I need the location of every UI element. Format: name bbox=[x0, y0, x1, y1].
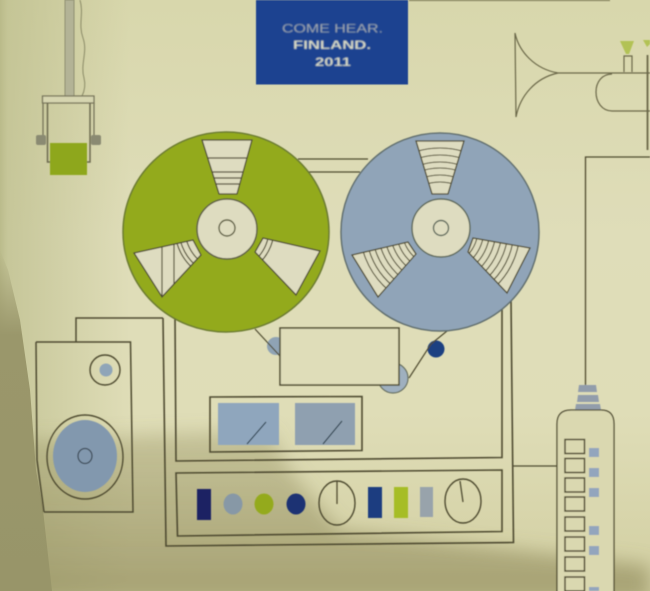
remote control bbox=[513, 157, 650, 591]
VU meters panel bbox=[210, 396, 362, 452]
speaker bbox=[36, 318, 163, 512]
connecting lines between reels bbox=[298, 159, 368, 172]
tape head box bbox=[280, 328, 399, 385]
label: come hear Finland 2011: COME HEAR. bbox=[282, 22, 383, 36]
reel: blue bbox=[341, 133, 539, 331]
control panel bbox=[176, 470, 502, 536]
label: come hear Finland 2011: FINLAND. bbox=[293, 38, 371, 52]
inner deck frame bbox=[175, 305, 502, 461]
icon: horn bbox=[515, 33, 650, 150]
top edge line bbox=[409, 0, 610, 2]
card edge on left bbox=[0, 250, 52, 591]
label: come hear Finland 2011 bbox=[256, 0, 408, 84]
reel: green bbox=[123, 132, 329, 332]
outer deck frame bbox=[163, 300, 514, 546]
lower photo shadow bbox=[20, 430, 650, 591]
icon: hanging microphone bbox=[36, 0, 101, 175]
label: come hear Finland 2011: 2011 bbox=[315, 55, 351, 69]
tape path and rollers bbox=[255, 329, 447, 393]
